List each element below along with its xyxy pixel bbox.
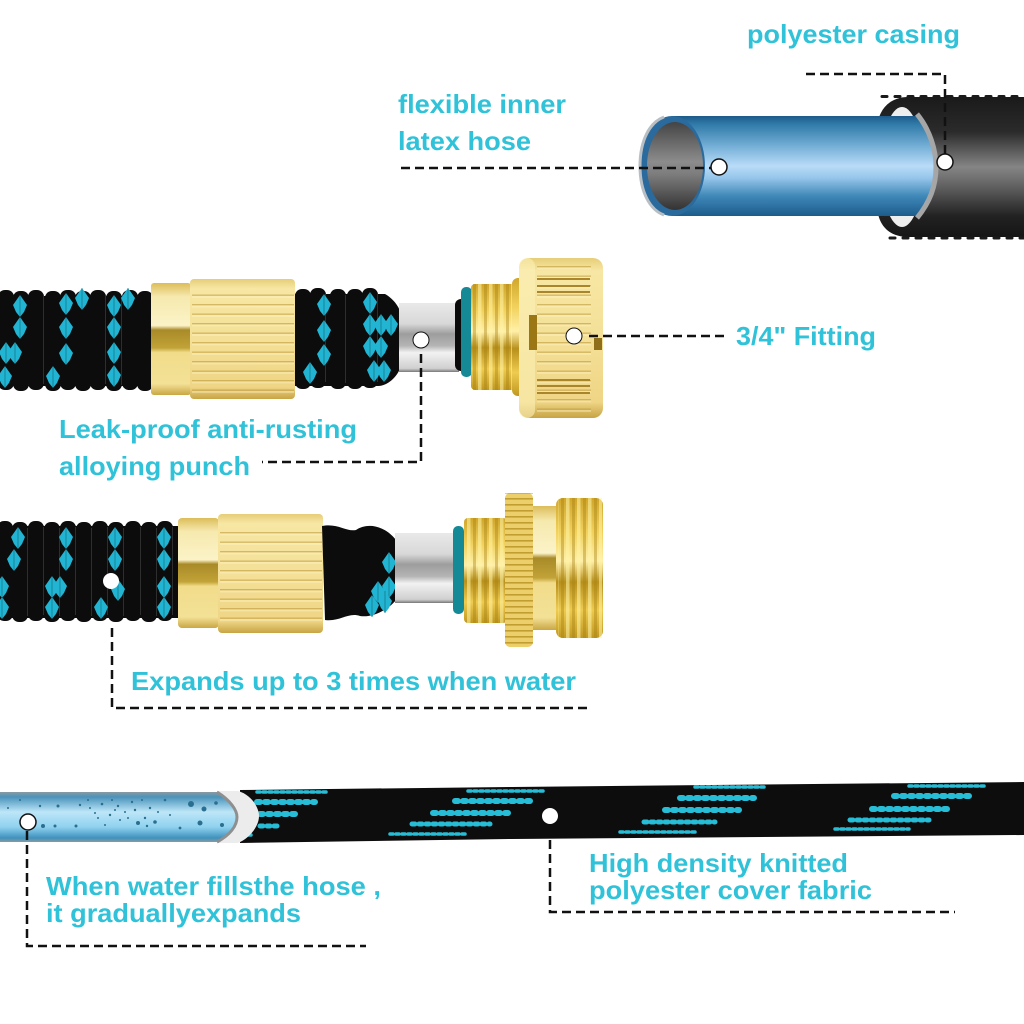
flexible blue inner hose <box>639 114 936 218</box>
callout: water fills the hose: When water fillsthe hose , <box>46 871 381 901</box>
brass body <box>530 506 560 630</box>
callout: flexible inner latex hose: latex hose <box>398 126 531 156</box>
knurled gold nut <box>218 514 323 633</box>
callout: water fills the hose <box>20 814 381 946</box>
callout: expands up to 3 times <box>103 573 588 708</box>
water droplets <box>7 799 224 829</box>
white cap <box>217 791 259 843</box>
callout: water fills the hose: it graduallyexpands <box>46 898 301 928</box>
knurled gold nut <box>190 279 295 399</box>
callout: leak-proof alloying punch: alloying punch <box>59 451 250 481</box>
panel: garden hose with 3/4 inch female fitting <box>0 258 603 418</box>
panel: straight hose with water and knitted cover <box>0 782 1024 843</box>
callout: high density knitted fabric: polyester cover fabric <box>589 875 872 905</box>
gold collar <box>178 518 219 628</box>
silver tube <box>399 303 459 372</box>
silver tube <box>395 533 455 603</box>
callout: 3/4 inch fitting: 3/4" Fitting <box>736 321 876 351</box>
gold collar <box>151 283 191 395</box>
knurled brass fitting head <box>519 258 603 418</box>
knitted black cover <box>240 782 1024 843</box>
callout: expands up to 3 times: Expands up to 3 times when water <box>131 666 576 696</box>
callout: high density knitted fabric: High density knitted <box>589 848 848 878</box>
brass wide thread <box>556 498 603 638</box>
callout: flexible inner latex hose <box>398 89 727 175</box>
brass thread <box>471 284 517 390</box>
callout: leak-proof alloying punch: Leak-proof anti-rusting <box>59 414 357 444</box>
brass short thread <box>464 518 507 623</box>
teal o-ring <box>455 287 472 377</box>
callout: leak-proof alloying punch <box>59 332 429 481</box>
black braid wrap <box>322 525 396 620</box>
callout: polyester casing <box>747 19 960 170</box>
brass flange <box>512 278 538 396</box>
callout: 3/4 inch fitting <box>566 321 876 351</box>
panel: garden hose with male fitting <box>0 493 603 647</box>
callout: flexible inner latex hose: flexible inner <box>398 89 566 119</box>
braided hose section right <box>295 288 401 389</box>
braided hose section <box>0 521 180 622</box>
teal o-ring <box>453 526 464 614</box>
callout: high density knitted fabric <box>542 808 955 912</box>
teal stripes <box>248 786 985 835</box>
callout: polyester casing: polyester casing <box>747 19 960 49</box>
water tube <box>0 792 237 842</box>
braided hose section left <box>0 288 153 391</box>
panel: inner hose and casing cross-section <box>639 96 1024 238</box>
knurled brass collar <box>505 493 533 647</box>
polyester casing tube <box>877 96 1024 238</box>
